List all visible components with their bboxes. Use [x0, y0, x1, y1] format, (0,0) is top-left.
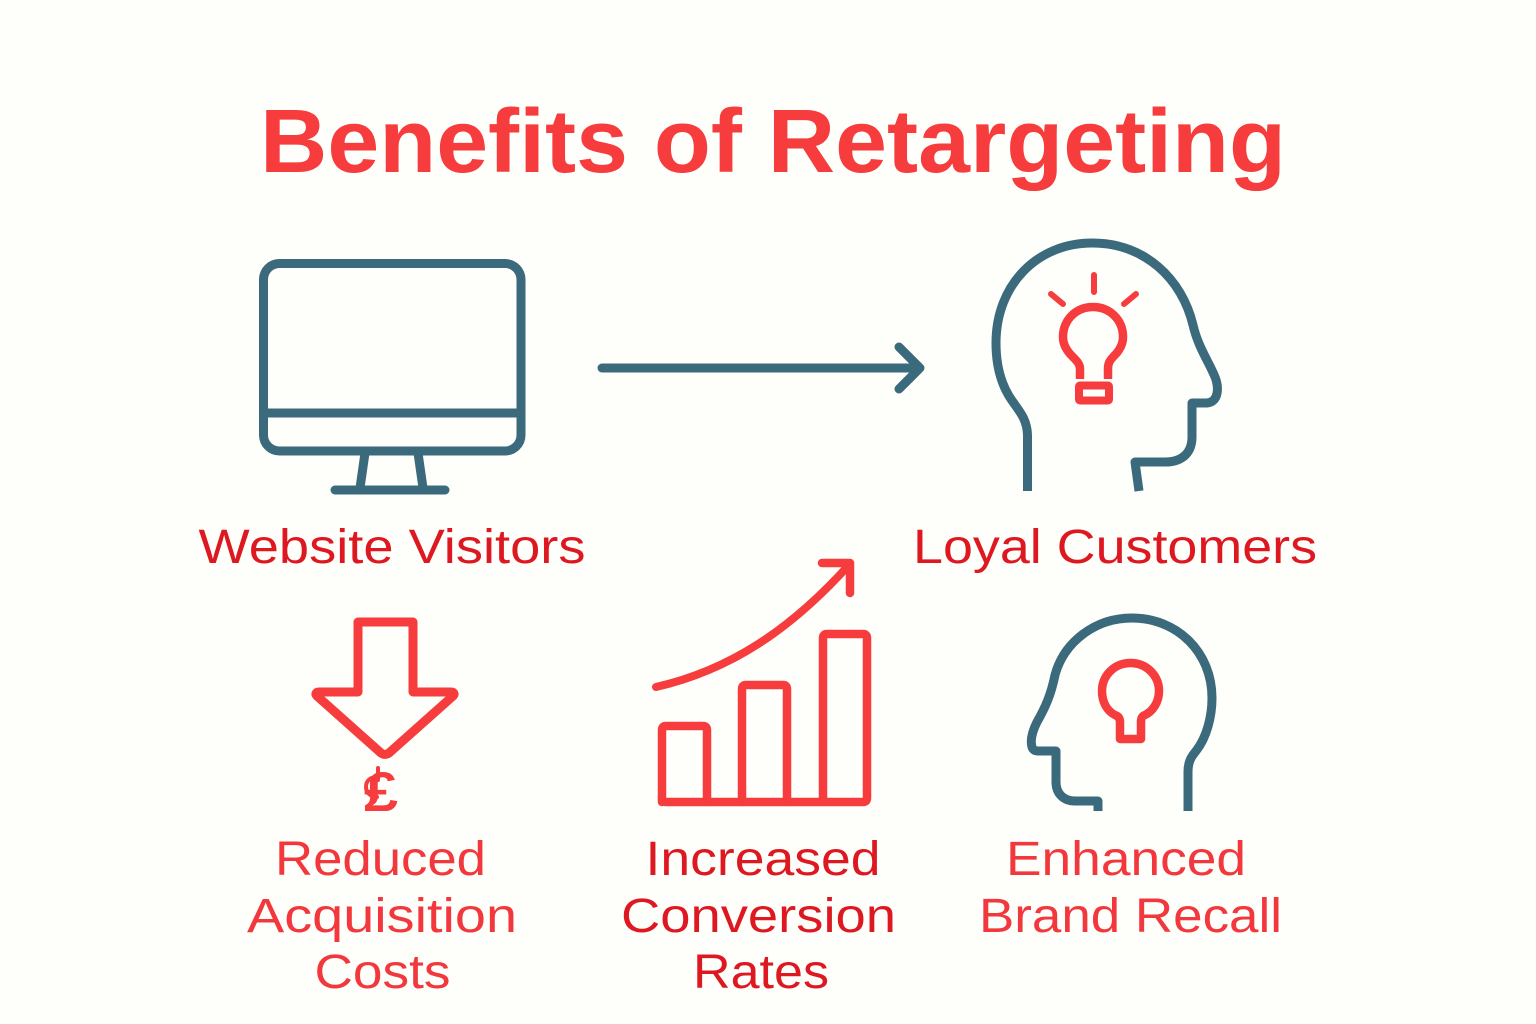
label: enhanced brand recall	[979, 833, 1282, 943]
icon: desktop monitor	[264, 264, 521, 490]
label: reduced acquisition costs: Reduced	[275, 833, 486, 886]
label: website visitors: Website Visitors	[198, 521, 586, 574]
label: enhanced brand recall: Brand Recall	[979, 890, 1282, 943]
bulb outline	[1102, 663, 1159, 739]
icon: head with bulb outline	[1031, 618, 1212, 811]
label: increased conversion rates: Conversion	[621, 890, 896, 943]
arrow: visitors to customers	[602, 347, 920, 389]
label: reduced acquisition costs: Acquisition	[247, 890, 517, 943]
label: reduced acquisition costs	[247, 833, 517, 999]
head outline	[1031, 618, 1212, 811]
down arrow	[316, 622, 454, 754]
icon: head with lightbulb	[996, 243, 1217, 491]
label: reduced acquisition costs: Costs	[314, 946, 450, 999]
head outline	[996, 243, 1217, 491]
icon: bar chart with rising arrow	[656, 563, 867, 802]
label: increased conversion rates	[621, 833, 896, 999]
icon: down arrow with pound sign	[316, 622, 454, 823]
lightbulb	[1051, 275, 1136, 400]
label: increased conversion rates: Rates	[693, 946, 829, 999]
title: Benefits of Retargeting	[260, 92, 1286, 192]
label: enhanced brand recall: Enhanced	[1006, 833, 1246, 886]
pound sign: £	[364, 760, 398, 823]
label: increased conversion rates: Increased	[646, 833, 880, 886]
label: loyal customers: Loyal Customers	[913, 521, 1317, 574]
